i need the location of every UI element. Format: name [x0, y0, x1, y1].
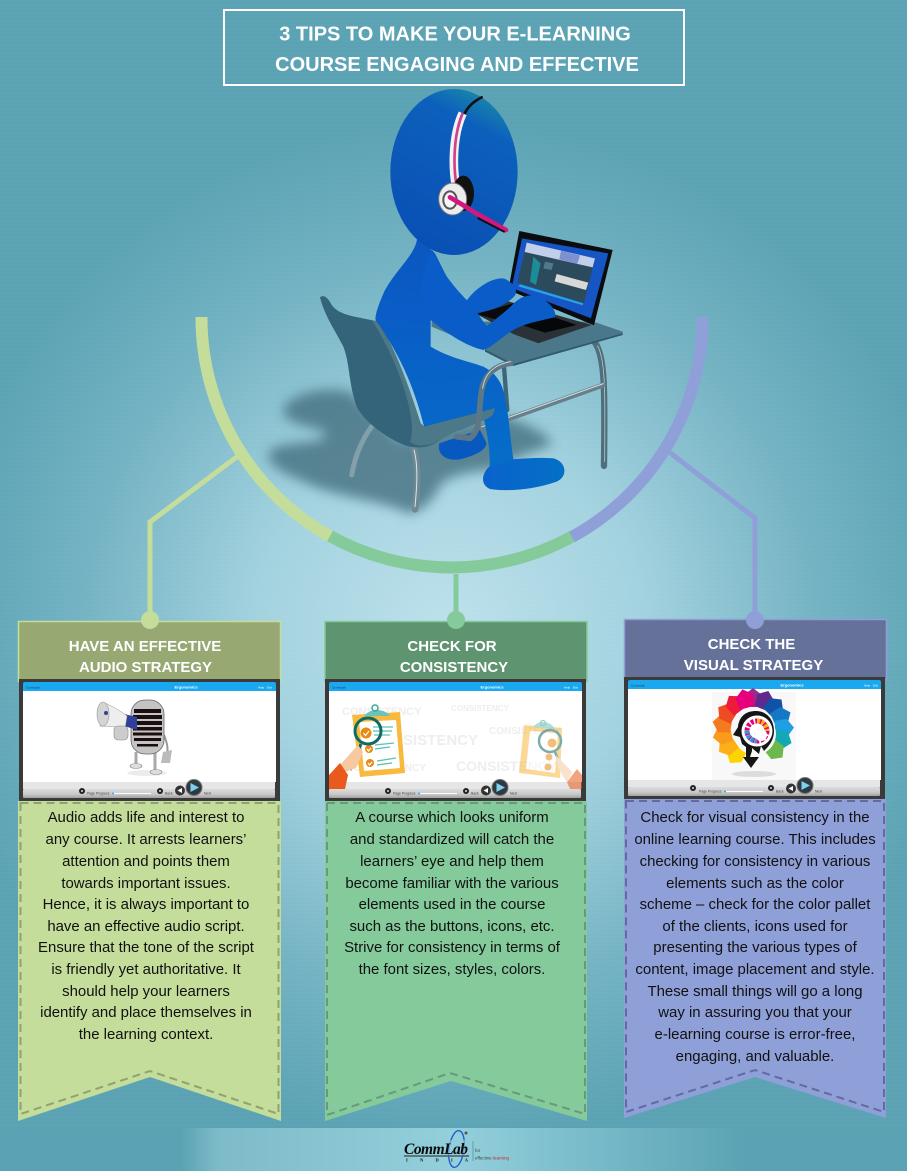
consistency connector dot — [447, 611, 465, 629]
faded CONSISTENCY words: CONSISTENCY — [342, 706, 422, 718]
consistency course screen: Ergonomics — [480, 684, 504, 690]
visual text body: e-learning course is error-free, — [655, 1026, 855, 1043]
front table leg — [457, 362, 511, 438]
panel: audio strategy — [18, 611, 281, 1121]
semicircular arc — [201, 317, 702, 567]
visual text body: content, image placement and style. — [635, 961, 875, 978]
audio connector dot — [141, 611, 159, 629]
audio heading: AUDIO STRATEGY — [79, 659, 212, 676]
audio text body: identify and place themselves in — [40, 1004, 252, 1021]
visual text body: scheme – check for the color pallet — [640, 896, 871, 913]
icon: microphone with megaphone — [97, 700, 172, 776]
consistency text body — [325, 801, 587, 1121]
visual header — [624, 620, 886, 680]
visual text body: elements such as the color — [666, 875, 844, 892]
faded CONSISTENCY words: CONSISTENCY — [456, 758, 558, 774]
visual course screen: Page Progress — [699, 790, 722, 794]
illustration: figure at laptop — [269, 89, 623, 513]
title box — [224, 10, 684, 85]
audio heading — [69, 638, 221, 676]
visual text body: checking for consistency in various — [640, 853, 870, 870]
visual course screen — [624, 677, 885, 799]
audio heading: HAVE AN EFFECTIVE — [69, 638, 221, 655]
consistency course screen: Help — [564, 686, 571, 690]
CommLab India logo: I N D I A — [406, 1158, 469, 1162]
title box: 3 TIPS TO MAKE YOUR E-LEARNING — [279, 24, 631, 46]
chair rear legs — [352, 427, 417, 509]
consistency course screen: Exit — [573, 686, 578, 690]
visual text body: Check for visual consistency in the — [640, 809, 870, 826]
audio course screen — [19, 679, 280, 801]
laptop screen — [508, 231, 613, 325]
audio course screen: CommLab — [26, 686, 40, 690]
consistency heading — [400, 638, 508, 676]
faded CONSISTENCY words: CONSISTENCY — [370, 732, 478, 749]
visual course screen: Ergonomics — [780, 682, 804, 688]
back table legs — [482, 343, 605, 466]
faded CONSISTENCY words — [342, 704, 562, 774]
audio text body: Ensure that the tone of the script — [38, 939, 255, 956]
icon: clipboard and magnifier, left — [329, 705, 405, 789]
audio text body: should help your learners — [62, 983, 230, 1000]
audio text body: the learning context. — [79, 1026, 213, 1043]
consistency header — [325, 622, 587, 682]
visual course screen: CommLab — [631, 684, 645, 688]
consistency course screen: Page Progress — [393, 792, 416, 796]
visual heading: CHECK THE — [708, 636, 795, 653]
visual text body: online learning course. This includes — [634, 831, 876, 848]
icon: clipboard and magnifier, right — [519, 720, 582, 789]
chair shell — [320, 296, 495, 447]
arm and hands — [421, 250, 555, 350]
audio course screen: Page Progress — [87, 792, 110, 796]
CommLab India logo: CommLab — [404, 1141, 468, 1158]
CommLab India logo: for — [475, 1148, 481, 1153]
head — [390, 89, 518, 255]
audio course screen: Next — [204, 792, 211, 796]
visual text body: These small things will go a long — [647, 983, 863, 1000]
title box: COURSE ENGAGING AND EFFECTIVE — [275, 54, 639, 76]
consistency course screen — [325, 679, 586, 801]
faded CONSISTENCY words: CONSISTENCY — [354, 763, 426, 774]
audio text body: Hence, it is always important to — [43, 896, 249, 913]
visual course screen: Help — [864, 684, 871, 688]
panel: consistency — [325, 611, 587, 1121]
panel: visual strategy — [624, 611, 886, 1118]
audio text body: Audio adds life and interest to — [48, 809, 244, 826]
consistency text body: such as the buttons, icons, etc. — [349, 918, 555, 935]
foot — [483, 458, 564, 490]
visual text body: presenting the various types of — [653, 939, 858, 956]
visual text body: of the clients, icons used for — [662, 918, 848, 935]
consistency text body: elements used in the course — [359, 896, 545, 913]
visual text body: engaging, and valuable. — [676, 1048, 834, 1065]
connector lines — [150, 452, 755, 622]
audio course screen: Ergonomics — [174, 684, 198, 690]
consistency text body: A course which looks uniform — [355, 809, 549, 826]
consistency course screen: Next — [510, 792, 517, 796]
table top — [432, 322, 623, 365]
audio text body: have an effective audio script. — [47, 918, 245, 935]
audio text body: any course. It arrests learners’ — [46, 831, 246, 848]
footer band — [0, 1128, 907, 1171]
visual course screen: Exit — [873, 684, 878, 688]
audio course screen: Back — [165, 792, 173, 796]
visual heading: VISUAL STRATEGY — [684, 657, 823, 674]
consistency text body: the font sizes, styles, colors. — [359, 961, 545, 978]
back foot — [439, 430, 487, 460]
consistency course screen: CommLab — [332, 686, 346, 690]
audio text body — [18, 801, 281, 1121]
visual text body: way in assuring you that your — [657, 1004, 852, 1021]
visual heading — [684, 636, 823, 674]
audio header — [18, 622, 280, 682]
icon: colour wheel head — [711, 687, 796, 780]
faded CONSISTENCY words: CONSISTENCY — [489, 726, 562, 737]
faded CONSISTENCY words: CONSISTENCY — [451, 704, 509, 713]
consistency text body: learners’ eye and help them — [360, 853, 544, 870]
visual course screen: Back — [776, 790, 784, 794]
floor shadow — [269, 390, 552, 513]
CommLab India logo: effective learning — [475, 1156, 509, 1160]
consistency course screen: Back — [471, 792, 479, 796]
consistency heading: CONSISTENCY — [400, 659, 508, 676]
audio text body: towards important issues. — [61, 875, 231, 892]
audio text body: attention and points them — [62, 853, 230, 870]
audio text body: is friendly yet authoritative. It — [51, 961, 241, 978]
headset — [439, 97, 506, 232]
audio course screen: Help — [258, 686, 265, 690]
laptop base — [475, 300, 592, 343]
consistency text body: Strive for consistency in terms of — [344, 939, 561, 956]
consistency text body: and standardized will catch the — [350, 831, 554, 848]
consistency heading: CHECK FOR — [407, 638, 497, 655]
torso and legs — [376, 237, 514, 468]
audio course screen: Exit — [267, 686, 272, 690]
visual connector dot — [746, 611, 764, 629]
visual text body — [624, 799, 886, 1118]
consistency text body: become familiar with the various — [345, 875, 559, 892]
visual course screen: Next — [815, 790, 822, 794]
CommLab India logo — [403, 1130, 509, 1168]
